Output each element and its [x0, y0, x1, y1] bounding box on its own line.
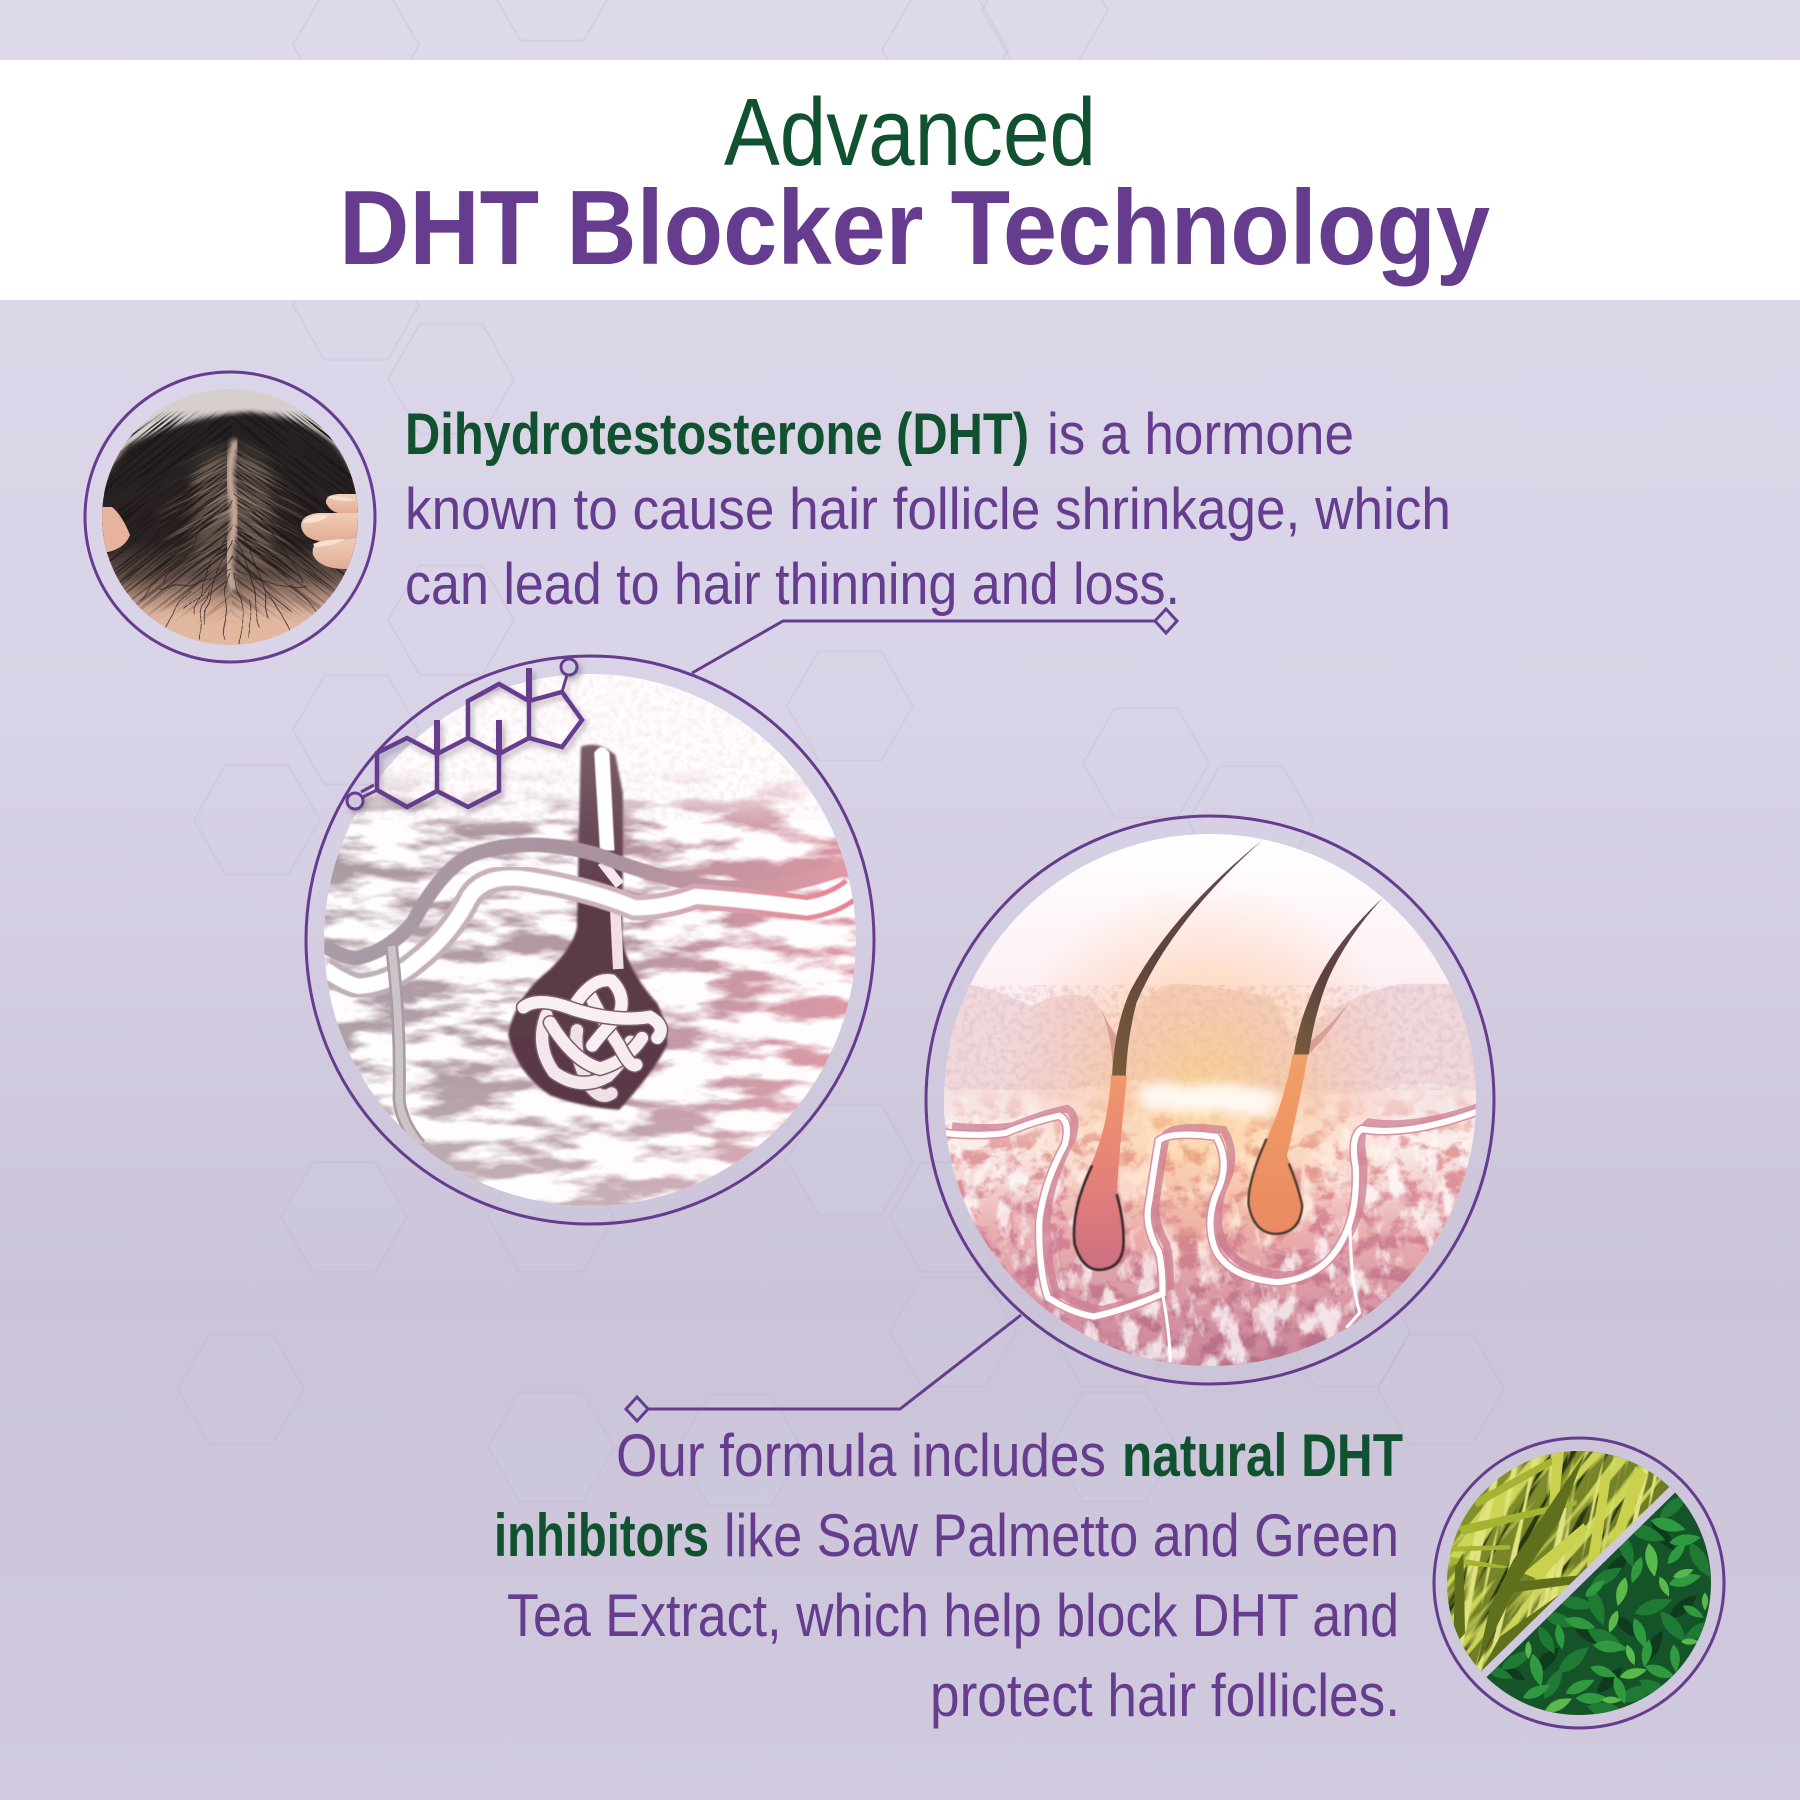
body text: natural DHT inhibitors: inhibitors [494, 1502, 709, 1569]
icon: DHT molecule [347, 659, 582, 809]
green tea leaves [1484, 1490, 1711, 1715]
connector: follicle illustration to text [626, 1315, 1021, 1421]
illustration: scalp follicle with DHT molecule [306, 656, 874, 1224]
saw palmetto fronds [1447, 1451, 1672, 1674]
body text: natural DHT inhibitors [494, 1422, 1403, 1729]
header band [0, 60, 1800, 300]
body text: natural DHT inhibitors: like Saw Palmetto and Green [724, 1502, 1399, 1569]
photo: saw palmetto and green tea leaves [1432, 1436, 1726, 1730]
body text: natural DHT inhibitors: protect hair follicles. [930, 1662, 1400, 1729]
connector: text to follicle illustration [692, 609, 1177, 673]
body text: what DHT is: Dihydrotestosterone (DHT) [405, 402, 1029, 467]
body text: what DHT is [405, 402, 1451, 617]
heading: Advanced: Advanced [724, 79, 1096, 186]
illustration: healthy hair follicles in skin [926, 816, 1494, 1384]
heading: DHT Blocker Technology: DHT Blocker Technology [339, 169, 1490, 287]
body text: natural DHT inhibitors: Tea Extract, which help block DHT and [507, 1582, 1399, 1649]
body text: what DHT is: known to cause hair follicle shrinkage, which [405, 477, 1451, 542]
body text: natural DHT inhibitors: natural DHT [1122, 1422, 1403, 1489]
photo: thinning scalp [84, 370, 376, 664]
body text: natural DHT inhibitors: Our formula includes [616, 1422, 1106, 1489]
body text: what DHT is: can lead to hair thinning and loss. [405, 552, 1180, 617]
body text: what DHT is: is a hormone [1047, 402, 1354, 467]
